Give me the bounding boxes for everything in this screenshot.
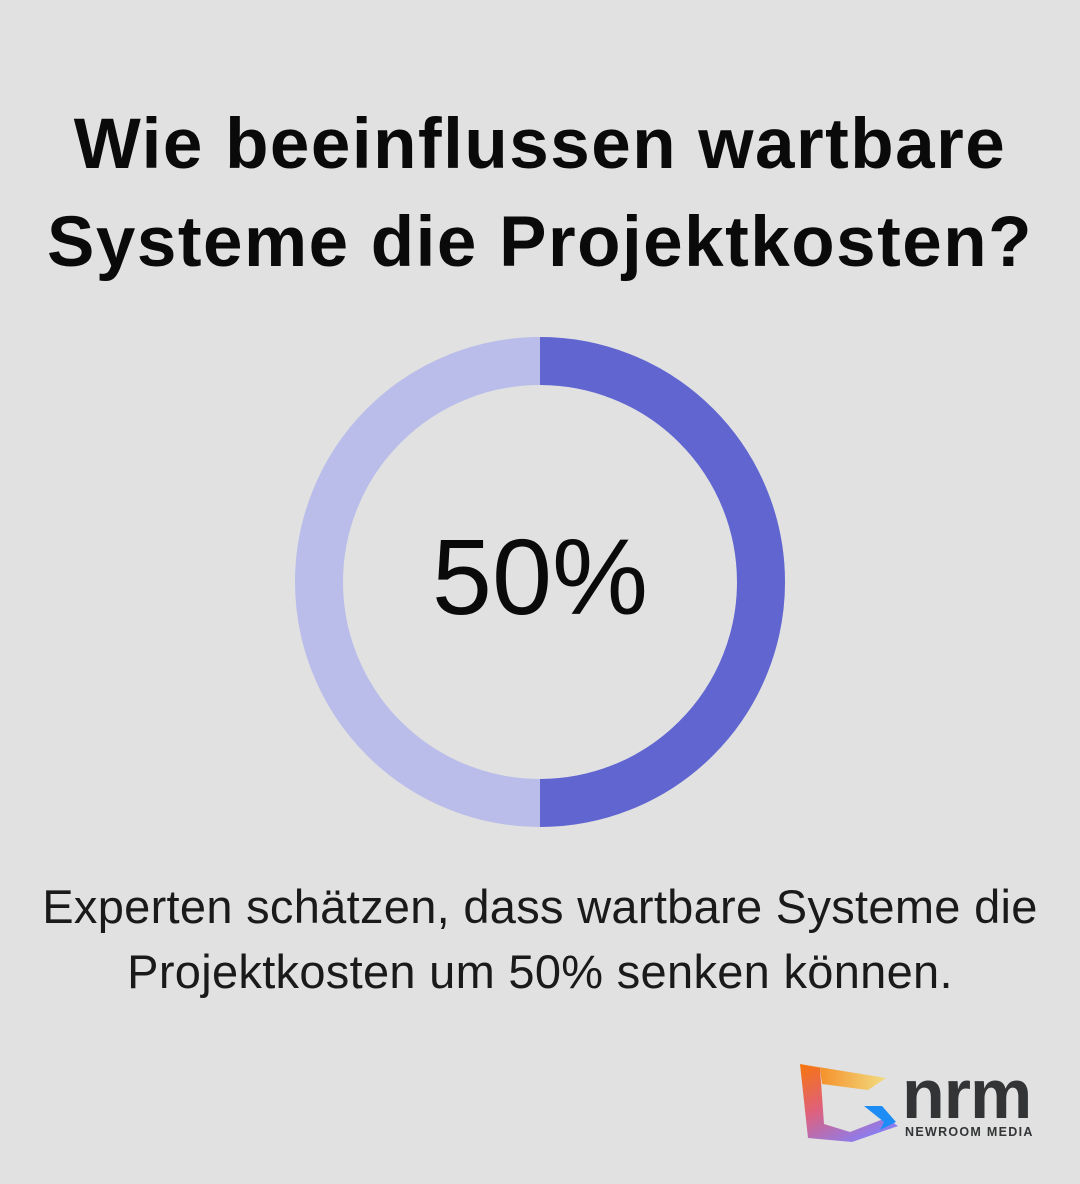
title: Wie beeinflussen wartbare — [74, 105, 1006, 184]
title — [47, 105, 1033, 282]
ring value 50% — [540, 361, 761, 803]
description text: Projektkosten um 50% senken können. — [127, 945, 953, 998]
description text — [42, 880, 1038, 998]
logo: NEWROOM MEDIA — [905, 1125, 1034, 1139]
ring background — [319, 361, 761, 803]
center value: 50% — [432, 516, 648, 637]
title: Systeme die Projektkosten? — [47, 203, 1033, 282]
description text: Experten schätzen, dass wartbare Systeme die — [42, 880, 1038, 933]
logo — [800, 1060, 1034, 1142]
